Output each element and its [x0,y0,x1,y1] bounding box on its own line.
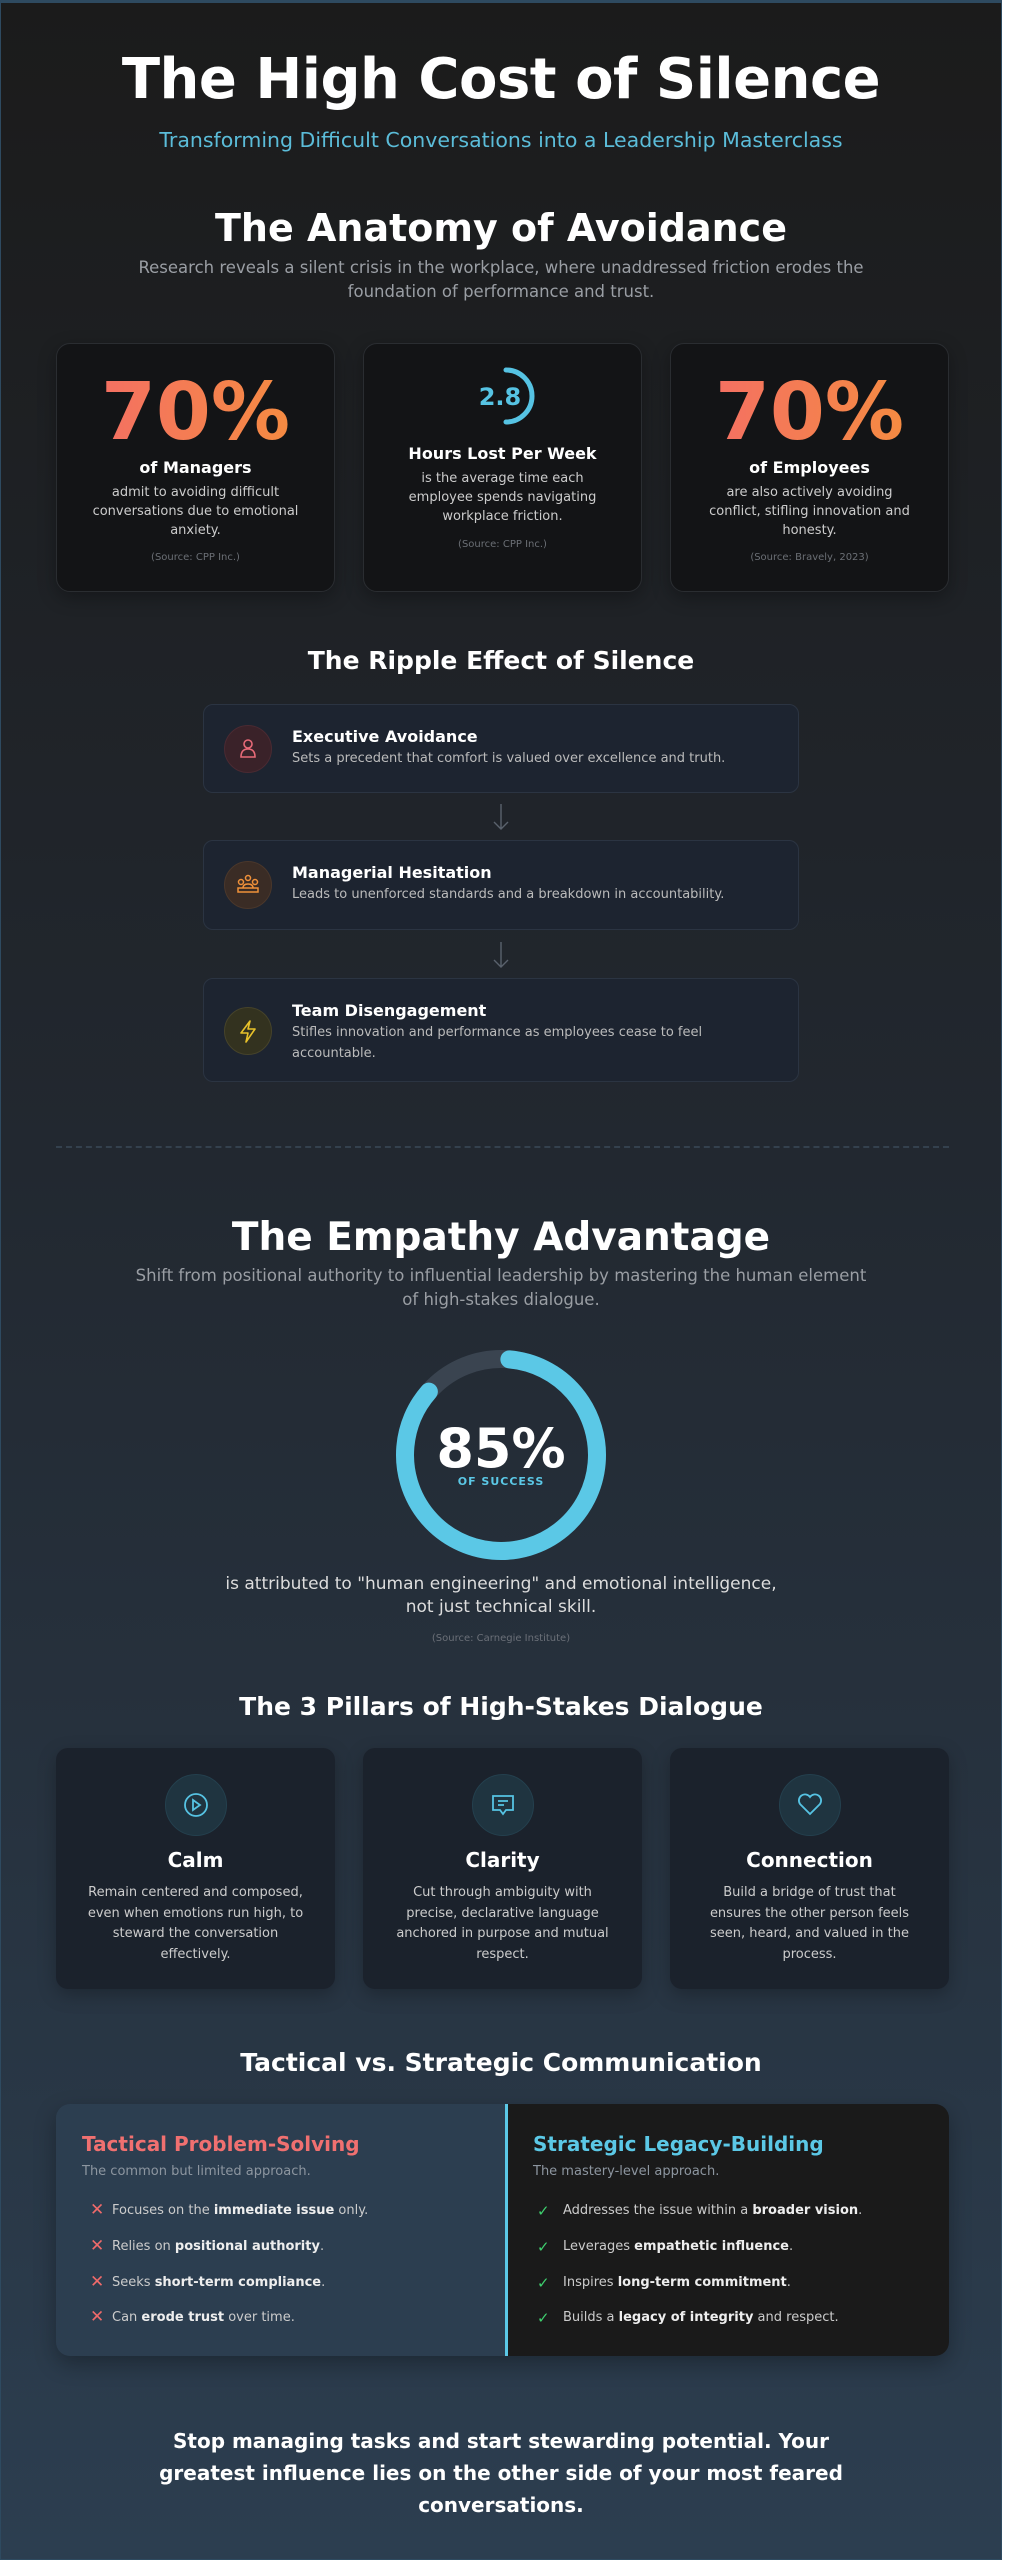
donut chart: 85% [396,1350,606,1560]
icon: play circle [165,1774,227,1836]
ripple card: team [203,978,799,1082]
description: are also actively avoiding conflict, stifling innovation and honesty. [709,485,910,538]
stat card: hours lost [363,343,642,592]
percent: 85% [436,1417,566,1480]
ripple card: managerial [203,840,799,930]
left column: tactical: ✕ [90,2272,104,2292]
description: Leads to unenforced standards and a breakdown in accountability. [292,887,724,902]
icon: arc gauge [479,368,534,424]
right column: strategic: Addresses the issue within a broader vision. [563,2203,862,2218]
left column: tactical: ✕ [90,2200,104,2220]
title: Executive Avoidance [292,727,478,746]
left column: tactical: Relies on positional authority. [112,2239,324,2254]
left column: tactical: Seeks short-term compliance. [112,2275,325,2290]
source: (Source: Carnegie Institute) [432,1633,570,1644]
ripple card: executive [203,704,799,793]
arrow [494,804,508,830]
right column: strategic: Builds a legacy of integrity and respect. [563,2310,839,2325]
right column: strategic: ✓ [537,2274,550,2292]
description: Sets a precedent that comfort is valued over excellence and truth. [292,751,725,766]
left column: tactical: ✕ [90,2307,104,2327]
source: (Source: CPP Inc.) [458,539,547,550]
right column: strategic: Leverages empathetic influence. [563,2239,793,2254]
right column: strategic [508,2104,949,2356]
left column: tactical: Tactical Problem-Solving [82,2132,360,2156]
arrow [494,942,508,968]
big number [57,366,334,458]
pillar: calm [56,1748,335,1989]
right column: strategic: ✓ [537,2238,550,2256]
title: Team Disengagement [292,1001,486,1020]
pillar: clarity: Cut through ambiguity with precise, declarative language anchored in purpose and mutual respect. [396,1885,609,1962]
heading: empathy advantage: The Empathy Advantage [232,1215,770,1260]
pillar: connection: Connection [746,1848,873,1872]
pillar: connection: Build a bridge of trust that ensures the other person feels seen, heard, and valued in the process. [710,1885,909,1962]
right column: strategic: Inspires long-term commitment. [563,2275,791,2290]
label: Hours Lost Per Week [408,444,597,463]
empathy subtitle: Shift from positional authority to influential leadership by mastering the human element of high-stakes dialogue. [136,1266,866,1309]
heading: tactical vs strategic: Tactical vs. Strategic Communication [240,2048,762,2077]
right column: strategic: The mastery-level approach. [533,2164,719,2179]
icon: heart [779,1774,841,1836]
title: The High Cost of Silence [122,47,880,112]
heading: ripple effect: The Ripple Effect of Silence [308,646,694,675]
description: Stifles innovation and performance as employees cease to feel accountable. [292,1025,702,1061]
pillar: calm: Calm [168,1848,223,1872]
left column: tactical: ✕ [90,2236,104,2256]
closing statement: Stop managing tasks and start stewarding potential. Your greatest influence lies on the other side of your most feared conversations. [159,2429,843,2517]
pillar: connection [670,1748,949,1989]
caption: OF SUCCESS [458,1475,544,1488]
pillar: clarity [363,1748,642,1989]
right column: strategic: Strategic Legacy-Building [533,2132,824,2156]
description: is the average time each employee spends navigating workplace friction. [409,471,596,524]
pillar: clarity: Clarity [465,1848,540,1872]
left column: tactical: The common but limited approach. [82,2164,311,2179]
label: of Employees [749,458,870,477]
intro text: Research reveals a silent crisis in the workplace, where unaddressed friction erodes the foundation of performance and trust. [138,258,864,301]
right column: strategic: ✓ [537,2202,550,2220]
icon: message [472,1774,534,1836]
source: (Source: CPP Inc.) [151,552,240,563]
stat card: managers [56,343,335,592]
big number [671,366,948,458]
source: (Source: Bravely, 2023) [750,552,869,563]
icon: lightning [224,1007,272,1055]
title: Managerial Hesitation [292,863,492,882]
heading: pillars: The 3 Pillars of High-Stakes Dialogue [239,1692,763,1721]
big number: 70% [101,366,290,458]
right column: strategic: ✓ [537,2309,550,2327]
left column: tactical: Focuses on the immediate issue only. [112,2203,368,2218]
icon: group [224,861,272,909]
comparison panel [56,2104,949,2356]
stat card: employees [670,343,949,592]
big number: 70% [715,366,904,458]
subtitle: Transforming Difficult Conversations into a Leadership Masterclass [159,128,843,152]
pillar: calm: Remain centered and composed, even when emotions run high, to steward the conversation effectively. [88,1885,303,1962]
icon: arc gauge: 2.8 [479,383,521,411]
left column: tactical: Can erode trust over time. [112,2310,295,2325]
label: of Managers [139,458,252,477]
heading: anatomy of avoidance: The Anatomy of Avoidance [215,206,787,250]
left column: tactical [56,2104,505,2356]
donut description: is attributed to "human engineering" and emotional intelligence, not just technical skill. [225,1574,777,1617]
icon: person [224,725,272,773]
description: admit to avoiding difficult conversations due to emotional anxiety. [93,485,298,538]
